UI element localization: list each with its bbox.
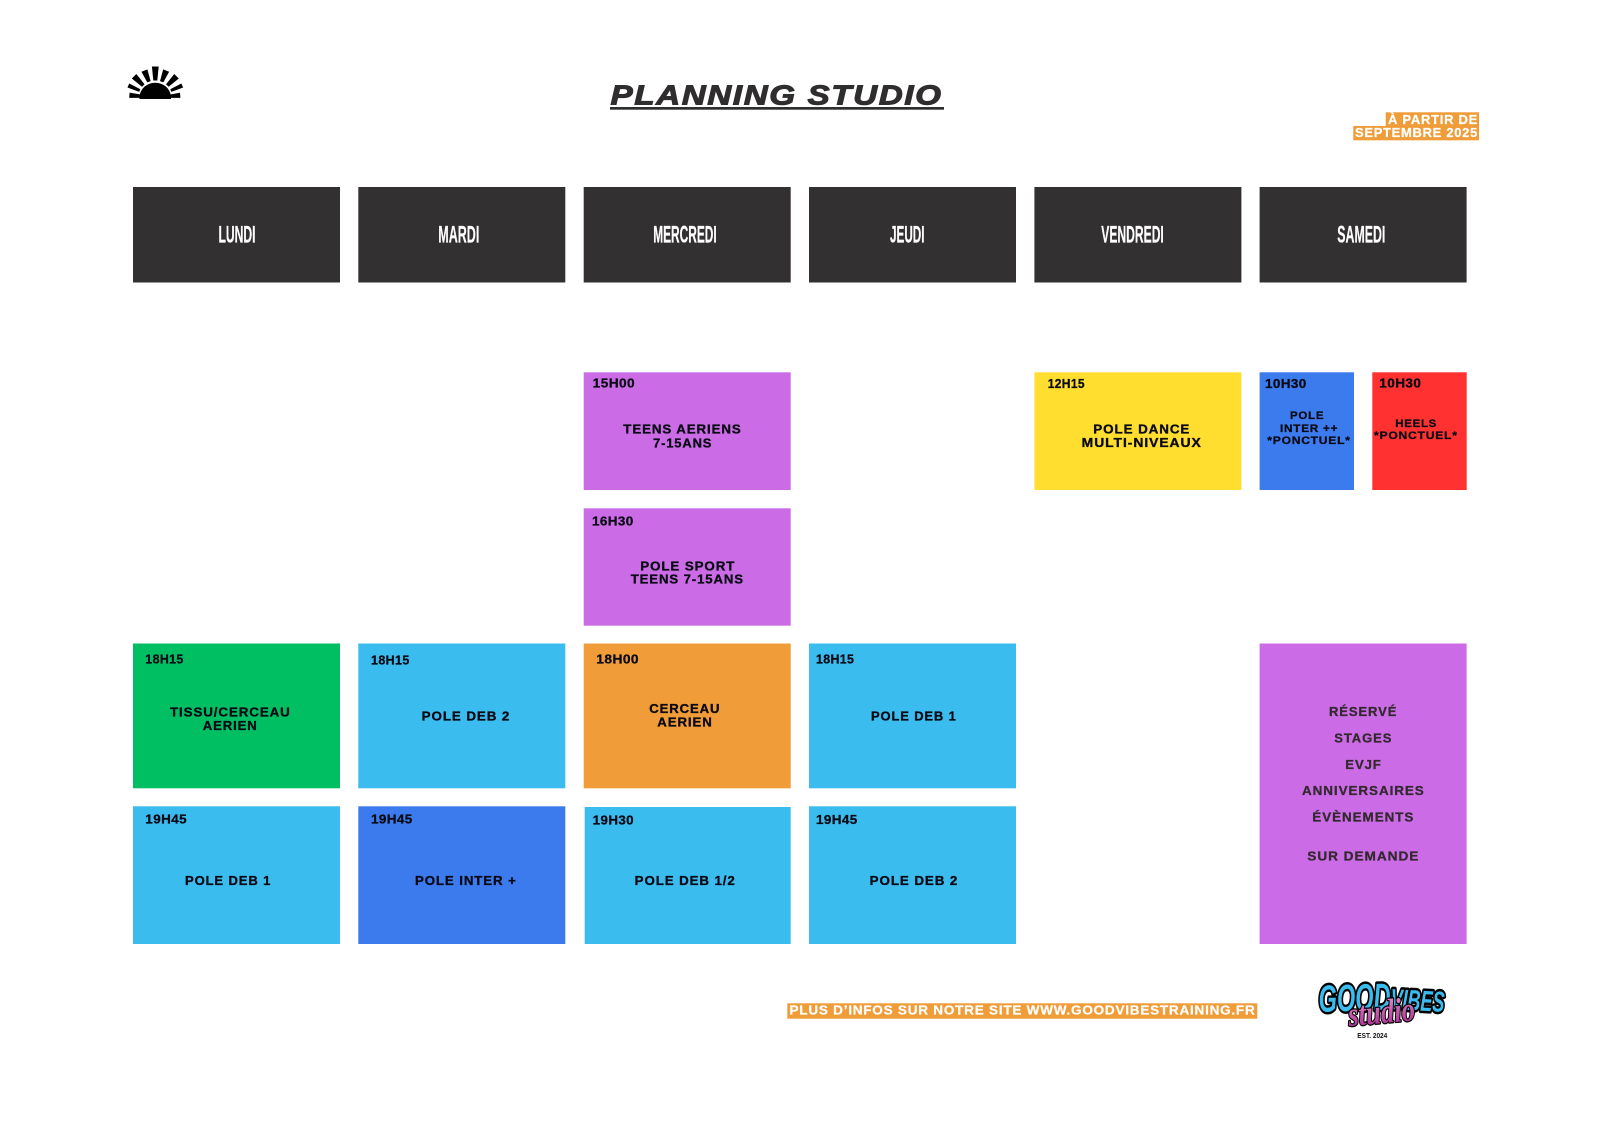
- class: tissu/cerceau aerien: 18H15: [145, 651, 184, 666]
- day header: mardi: MARDI: [438, 222, 479, 248]
- class: pole deb 2 jeudi: POLE DEB 2: [870, 873, 958, 888]
- class: pole deb 1 jeudi: POLE DEB 1: [871, 708, 957, 723]
- panel: reserved samedi: [1260, 644, 1467, 944]
- class: pole inter +: 19H45: [371, 812, 413, 827]
- class: pole deb 2 jeudi: [809, 806, 1016, 944]
- day header: vendredi: [1034, 187, 1241, 282]
- class: pole deb 1 lundi: [133, 806, 340, 944]
- class: pole dance multi-niveaux: [1034, 372, 1241, 490]
- start date badge: [1353, 112, 1479, 140]
- logo: good vibes studio: VIBES: [1390, 984, 1446, 1019]
- logo: good vibes studio: GOOD: [1318, 977, 1391, 1021]
- day header: samedi: [1260, 187, 1467, 282]
- class: pole inter +: POLE INTER +: [415, 873, 517, 888]
- title: PLANNING STUDIO: [611, 79, 943, 110]
- class: pole deb 1 jeudi: 18H15: [816, 651, 854, 666]
- class: pole deb 1 jeudi: [809, 644, 1016, 788]
- class: pole deb 1 lundi: POLE DEB 1: [185, 873, 271, 888]
- day header: jeudi: [809, 187, 1016, 282]
- day header: mardi: [358, 187, 565, 282]
- class: heels ponctuel: *PONCTUEL*: [1374, 430, 1458, 442]
- logo: good vibes studio: [1318, 977, 1446, 1040]
- day header: vendredi: VENDREDI: [1101, 222, 1164, 248]
- class: cerceau aerien: CERCEAU: [649, 701, 720, 716]
- class: pole dance multi-niveaux: POLE DANCE: [1093, 421, 1190, 436]
- class: teens aeriens: 7-15ANS: [653, 435, 712, 450]
- class: heels ponctuel: [1372, 372, 1467, 490]
- class: heels ponctuel: HEELS: [1395, 418, 1437, 430]
- class: pole deb 1/2: POLE DEB 1/2: [635, 873, 736, 888]
- class: pole deb 1/2: [585, 807, 791, 944]
- class: pole sport teens: [584, 508, 791, 626]
- class: cerceau aerien: 18H00: [596, 651, 639, 666]
- start date badge: À PARTIR DE: [1388, 112, 1478, 127]
- logo: good vibes studio: EST. 2024: [1357, 1033, 1387, 1040]
- day header: jeudi: JEUDI: [890, 222, 924, 248]
- icon: sun logo: [127, 66, 183, 99]
- day header: mercredi: [584, 187, 791, 282]
- panel: reserved samedi: EVJF: [1345, 757, 1382, 772]
- panel: reserved samedi: RÉSERVÉ: [1329, 704, 1397, 719]
- class: cerceau aerien: [584, 644, 791, 788]
- class: pole deb 2 mardi: 18H15: [371, 652, 410, 667]
- footer website banner: PLUS D’INFOS SUR NOTRE SITE WWW.GOODVIBESTRAINING.FR: [790, 1003, 1256, 1017]
- class: pole deb 2 mardi: [358, 644, 565, 788]
- class: pole sport teens: POLE SPORT: [640, 559, 735, 574]
- class: pole sport teens: 16H30: [592, 514, 634, 529]
- day header: lundi: [133, 187, 340, 282]
- logo: good vibes studio: studio: [1346, 991, 1416, 1034]
- class: teens aeriens: [584, 372, 791, 490]
- panel: reserved samedi: ANNIVERSAIRES: [1302, 783, 1425, 798]
- class: pole inter +: [358, 806, 565, 944]
- class: pole deb 2 jeudi: 19H45: [816, 812, 858, 827]
- class: pole inter ++ ponctuel: POLE: [1290, 410, 1324, 422]
- panel: reserved samedi: ÉVÈNEMENTS: [1312, 810, 1414, 824]
- class: cerceau aerien: AERIEN: [657, 715, 713, 730]
- class: pole dance multi-niveaux: MULTI-NIVEAUX: [1082, 435, 1202, 450]
- class: pole sport teens: TEENS 7-15ANS: [631, 571, 744, 586]
- class: pole inter ++ ponctuel: [1260, 372, 1354, 490]
- class: teens aeriens: 15H00: [593, 375, 635, 390]
- class: pole inter ++ ponctuel: 10H30: [1265, 376, 1307, 391]
- panel: reserved samedi: STAGES: [1334, 730, 1392, 746]
- day header: mercredi: MERCREDI: [653, 222, 717, 248]
- day header: samedi: SAMEDI: [1337, 222, 1385, 248]
- day header: lundi: LUNDI: [218, 222, 256, 248]
- class: heels ponctuel: 10H30: [1379, 375, 1421, 390]
- class: teens aeriens: TEENS AERIENS: [623, 422, 742, 437]
- class: pole deb 1/2: 19H30: [593, 812, 634, 827]
- class: pole dance multi-niveaux: 12H15: [1048, 376, 1085, 391]
- class: pole inter ++ ponctuel: *PONCTUEL*: [1267, 435, 1351, 447]
- start date badge: SEPTEMBRE 2025: [1355, 126, 1478, 140]
- class: tissu/cerceau aerien: TISSU/CERCEAU: [170, 704, 291, 719]
- panel: reserved samedi: SUR DEMANDE: [1307, 849, 1419, 864]
- class: pole deb 2 mardi: POLE DEB 2: [422, 708, 510, 723]
- class: pole deb 1 lundi: 19H45: [145, 812, 187, 827]
- class: pole inter ++ ponctuel: INTER ++: [1280, 423, 1338, 435]
- class: tissu/cerceau aerien: [133, 644, 340, 788]
- class: tissu/cerceau aerien: AERIEN: [203, 718, 258, 733]
